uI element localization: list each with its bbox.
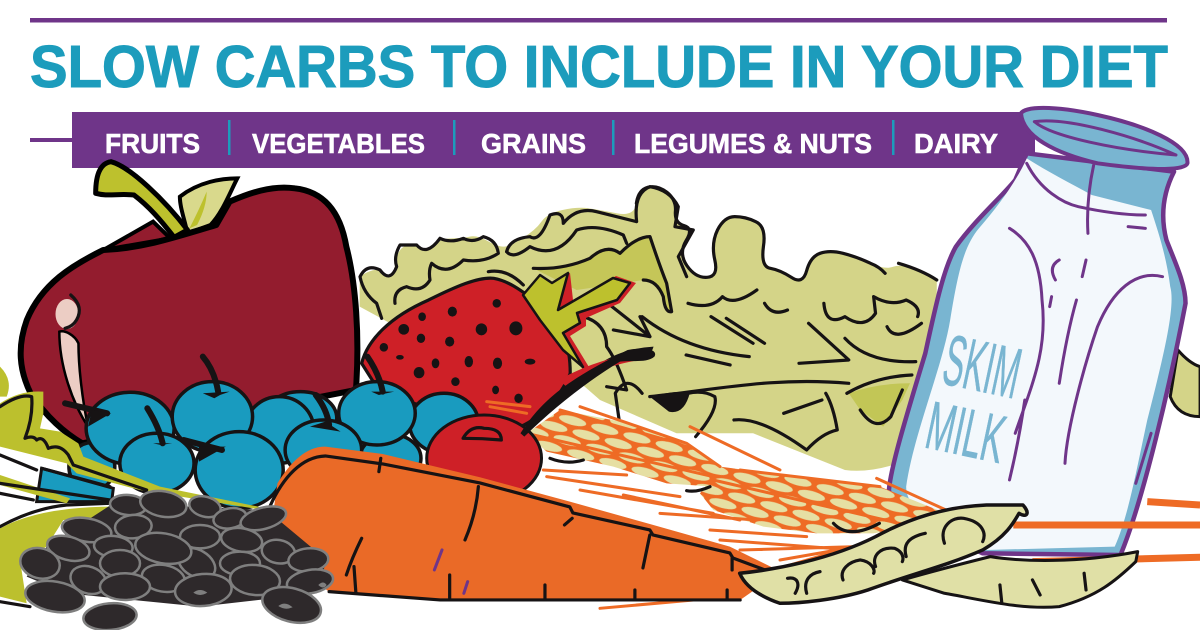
wheat (487, 402, 953, 608)
lettuce frill lines (360, 187, 693, 390)
category: grains: GRAINS (481, 128, 586, 159)
title: SLOW CARBS TO INCLUDE IN YOUR DIET (30, 34, 1168, 100)
category: dairy: DAIRY (914, 128, 998, 159)
carrot greens (0, 367, 267, 607)
black beans (17, 487, 335, 630)
milk bottle (889, 108, 1188, 555)
cherry (427, 349, 655, 502)
category: vegetables: VEGETABLES (252, 128, 425, 159)
category: fruits: FRUITS (105, 128, 200, 159)
apple (21, 162, 357, 443)
infographic: SKIM (937, 320, 1028, 414)
pea pods (740, 505, 1138, 607)
strawberry seeds (380, 299, 535, 403)
blueberries (65, 357, 478, 508)
side rule (30, 138, 74, 142)
skim milk label (920, 320, 1028, 478)
category: legumes and nuts: LEGUMES & NUTS (634, 128, 872, 159)
strawberry calyx (523, 273, 636, 372)
distant wheat stalks (1013, 502, 1200, 562)
carrot (268, 447, 781, 600)
strawberry (362, 278, 570, 427)
category bar (72, 112, 1035, 168)
top rule (30, 18, 1167, 22)
label word: milk: MILK (920, 387, 1012, 478)
lettuce (360, 187, 1200, 471)
